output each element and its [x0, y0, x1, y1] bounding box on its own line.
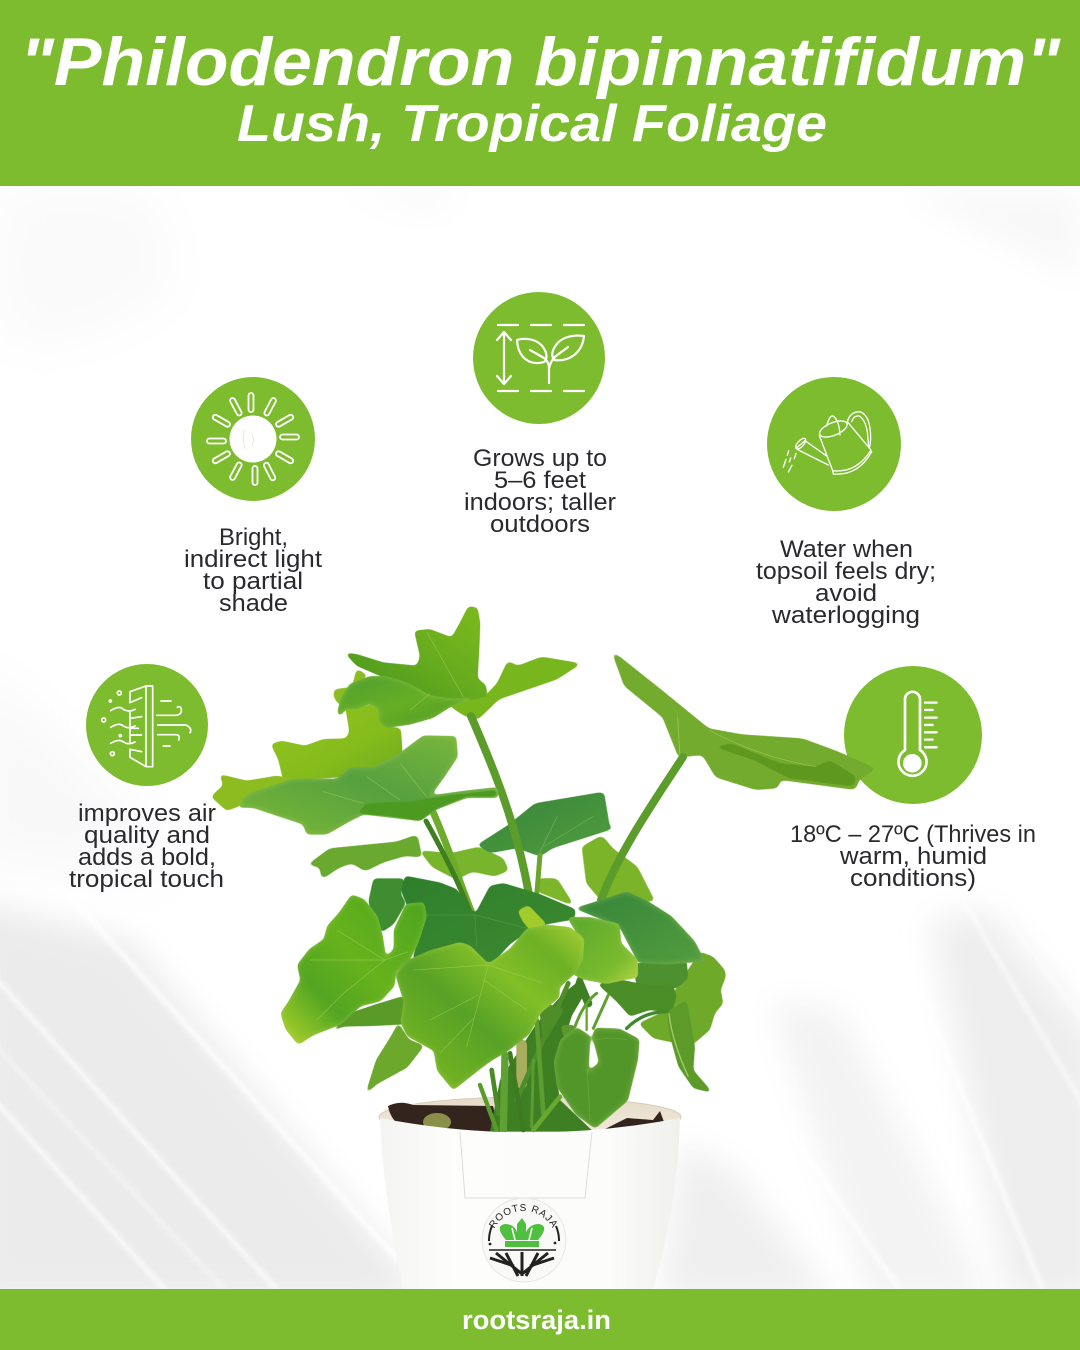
text: air quality: adds a bold,: [78, 844, 216, 871]
icon: air purifying filter: [86, 664, 208, 786]
leaf: under left: [327, 996, 405, 1034]
leaf: big dark: [401, 876, 576, 963]
leaf: mid big: [237, 736, 498, 834]
leaf: upper right: [611, 649, 876, 790]
text: watering: Water when: [780, 536, 913, 563]
text: light requirement: indirect light: [184, 546, 322, 573]
text: light requirement: Bright,: [219, 524, 288, 551]
text: watering: topsoil feels dry;: [756, 558, 936, 585]
leaf: bottom heart: [554, 1027, 639, 1128]
leaf: tiny bright: [517, 905, 548, 930]
text: height: Grows up to: [473, 445, 607, 472]
leaf: top front lobe: [337, 676, 478, 728]
leaf group: far right and back (right crop coordinates): [480, 952, 726, 1132]
text: height: outdoors: [490, 511, 590, 538]
leaf: behind top: [333, 668, 368, 707]
leaf: far left lobe: [211, 774, 298, 811]
icon: plant height: [473, 292, 605, 424]
leaf: lower left small: [307, 834, 422, 880]
leaf: drooping tip: [667, 1000, 713, 1093]
text: height: [464, 445, 616, 538]
small stem leaves: [538, 1002, 565, 1045]
stem bunch: [480, 980, 667, 1132]
leaf: centre small: [419, 847, 509, 880]
text: air quality: quality and: [84, 822, 210, 849]
leaf: far right lower: [638, 952, 726, 1046]
leaf: top right lobe: [448, 657, 582, 720]
sticker logo: ROOTS RAJA: [488, 1204, 557, 1228]
leaf: drooping dark: [597, 980, 677, 1017]
text: watering: avoid: [815, 580, 877, 607]
text: light requirement: [184, 524, 322, 617]
pot rim and soil: [379, 1097, 681, 1137]
subtitle: Lush, Tropical Foliage: [237, 95, 827, 153]
leaf: left yellow: [271, 703, 403, 781]
text: temperature: conditions): [850, 865, 976, 892]
plant: [211, 606, 876, 1132]
title: "Philodendron bipinnatifidum": [20, 24, 1061, 100]
text: temperature: 18ºC – 27ºC (Thrives in: [790, 821, 1036, 848]
text: height: 5–6 feet: [494, 467, 586, 494]
stems: [426, 716, 683, 918]
leaf: mid big underside: [357, 790, 497, 821]
text: height: indoors; taller: [464, 489, 616, 516]
sticker logo: [482, 1198, 566, 1282]
leaf group: lower left (lower left crop coordinates): [281, 876, 576, 1095]
website: rootsraja.in: [462, 1305, 611, 1335]
icon: sun: [191, 377, 315, 501]
leaf: upper right underside: [713, 743, 856, 787]
header band: [0, 0, 1080, 186]
leaf: small bright: [567, 917, 638, 984]
icon: watering can: [767, 377, 901, 511]
leaf group: top cluster (upper left crop coordinates): [211, 606, 498, 834]
footer band: [0, 1289, 1080, 1350]
text: air quality: [69, 800, 224, 893]
text: watering: waterlogging: [771, 602, 920, 629]
leaf: main front: [396, 925, 584, 1090]
text: light requirement: to partial: [203, 568, 303, 595]
leaf: centre blue-green: [477, 792, 615, 857]
text: temperature: [790, 821, 1036, 892]
leaf: dark back left: [368, 878, 406, 933]
leaf group: centre right (right crop coordinates): [517, 892, 705, 984]
leaf: yellow behind stem: [582, 835, 655, 902]
text: air quality: tropical touch: [69, 866, 224, 893]
text: light requirement: shade: [219, 590, 288, 617]
leaf: dark right: [575, 892, 705, 964]
leaf: top back lobes: [344, 606, 488, 701]
pot: [380, 1118, 680, 1289]
text: temperature: warm, humid: [839, 843, 987, 870]
leaf: left bright: [281, 895, 427, 1045]
icon: thermometer: [844, 666, 982, 804]
text: air quality: improves air: [78, 800, 216, 827]
leaf group: middle and upper (first crop coordinates): [307, 649, 876, 907]
leaf: right flat dark: [633, 960, 688, 988]
text: watering: [756, 536, 936, 629]
leaf: small centre: [537, 878, 575, 907]
leaf: lower: [365, 1023, 424, 1095]
